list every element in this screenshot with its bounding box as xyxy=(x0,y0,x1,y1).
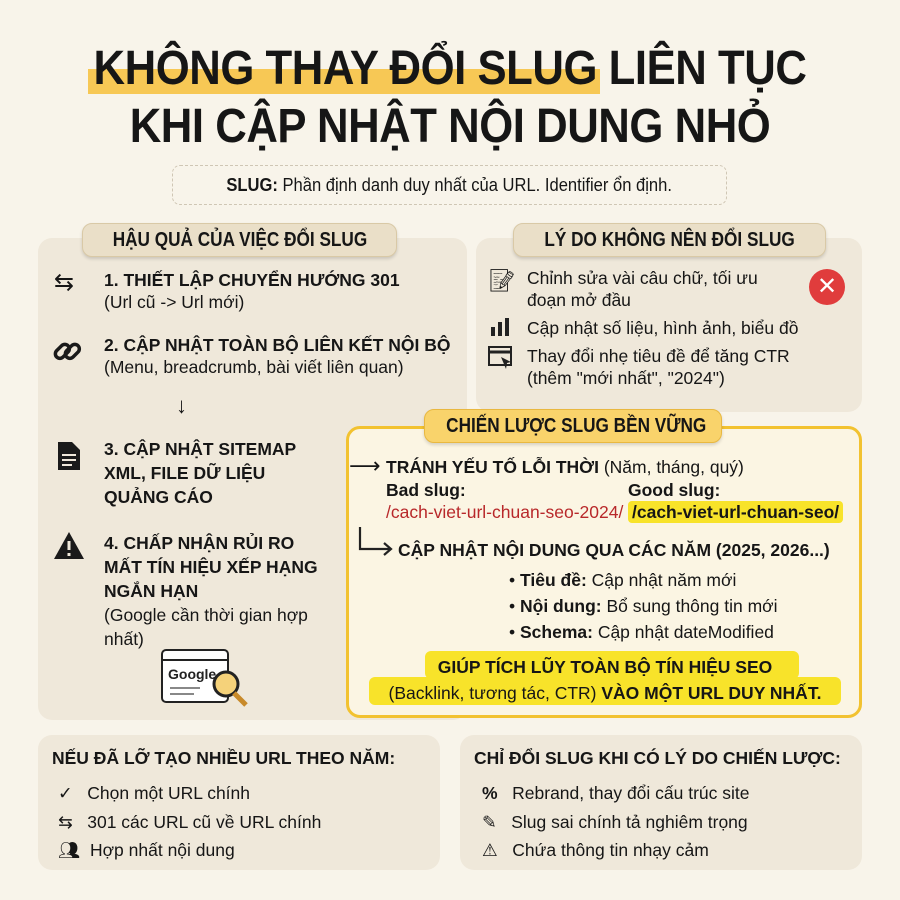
icon: google search xyxy=(161,649,248,707)
conclusion highlight xyxy=(369,651,841,705)
bad slug: /cach-viet-url-chuan-seo-2024/ xyxy=(386,502,623,522)
icon: edit: 📝︎ xyxy=(488,268,516,293)
item 4: (Google cần thời gian hợp xyxy=(104,605,308,625)
item 4: nhất) xyxy=(104,629,144,649)
icon: link xyxy=(54,342,82,360)
item 3: 3. CẬP NHẬT SITEMAP xyxy=(104,439,296,459)
item 4 xyxy=(104,533,318,649)
item 3: XML, FILE DỮ LIỆU xyxy=(104,463,265,483)
heading: NẾU ĐÃ LỠ TẠO NHIỀU URL THEO NĂM: xyxy=(52,748,395,768)
conclusion highlight: (Backlink, tương tác, CTR) VÀO MỘT URL DUY NHẤT. xyxy=(389,683,821,703)
bullet list: • Nội dung: Bổ sung thông tin mới xyxy=(509,596,778,616)
title: KHÔNG THAY ĐỔI SLUG LIÊN TỤC xyxy=(94,42,806,95)
panel: consequences xyxy=(38,238,467,720)
panel: change only for strategic reasons xyxy=(460,735,862,870)
subtitle definition box xyxy=(172,165,727,205)
heading: CHỈ ĐỔI SLUG KHI CÓ LÝ DO CHIẾN LƯỢC: xyxy=(474,748,841,768)
list: 👥︎ Hợp nhất nội dung xyxy=(58,840,235,860)
panel: sustainable slug strategy xyxy=(346,426,862,718)
good slug: /cach-viet-url-chuan-seo/ xyxy=(632,502,839,522)
item 2: 2. CẬP NHẬT TOÀN BỘ LIÊN KẾT NỘI BỘ xyxy=(104,335,450,355)
item 1 xyxy=(104,270,400,312)
L arrow xyxy=(358,527,393,556)
icon: google search: Google xyxy=(168,666,216,682)
reason 3 xyxy=(527,346,790,388)
reason 2: Cập nhật số liệu, hình ảnh, biểu đồ xyxy=(527,318,798,338)
icon: browser cursor xyxy=(488,346,512,369)
item 4: 4. CHẤP NHẬN RỦI RO xyxy=(104,533,294,553)
header: consequences: HẬU QUẢ CỦA VIỆC ĐỔI SLUG xyxy=(112,229,367,251)
subtitle definition box: SLUG: Phần định danh duy nhất của URL. Identifier ổn định. xyxy=(227,175,672,195)
title highlight xyxy=(88,69,600,94)
icon: red x: ✕ xyxy=(817,273,837,300)
icon: warning xyxy=(54,532,84,559)
item 2: (Menu, breadcrumb, bài viết liên quan) xyxy=(104,357,404,377)
avoid outdated: TRÁNH YẾU TỐ LỖI THỜI (Năm, tháng, quý) xyxy=(386,457,744,477)
conclusion highlight: GIÚP TÍCH LŨY TOÀN BỘ TÍN HIỆU SEO xyxy=(438,657,772,677)
item 3 xyxy=(104,439,296,507)
icon: chart xyxy=(491,318,509,336)
title: KHI CẬP NHẬT NỘI DUNG NHỎ xyxy=(130,100,770,153)
list xyxy=(58,783,321,860)
good slug xyxy=(628,480,843,523)
list: ✎ Slug sai chính tả nghiêm trọng xyxy=(482,812,748,832)
header: strategy xyxy=(424,409,722,443)
header: reasons: LÝ DO KHÔNG NÊN ĐỔI SLUG xyxy=(544,229,795,251)
list: % Rebrand, thay đổi cấu trúc site xyxy=(482,783,750,803)
icon: document xyxy=(58,442,80,470)
reason 3: (thêm "mới nhất", "2024") xyxy=(527,368,725,388)
title xyxy=(88,40,806,153)
item 4: NGẮN HẠN xyxy=(104,581,198,601)
panel: if multiple yearly urls xyxy=(38,735,440,870)
reason 1: đoạn mở đầu xyxy=(527,290,631,310)
item 4: MẤT TÍN HIỆU XẾP HẠNG xyxy=(104,557,318,577)
reason 1: Chỉnh sửa vài câu chữ, tối ưu xyxy=(527,268,758,288)
update content over years: CẬP NHẬT NỘI DUNG QUA CÁC NĂM (2025, 2026...) xyxy=(398,540,830,560)
list xyxy=(482,783,750,860)
list: ✓ Chọn một URL chính xyxy=(58,783,250,803)
icon: red x xyxy=(809,269,845,305)
panel: reasons not to change xyxy=(476,238,862,412)
header: strategy: CHIẾN LƯỢC SLUG BỀN VỮNG xyxy=(446,415,706,437)
bullet list: • Tiêu đề: Cập nhật năm mới xyxy=(509,570,736,590)
item 1: 1. THIẾT LẬP CHUYỂN HƯỚNG 301 xyxy=(104,270,400,290)
reason 3: Thay đổi nhẹ tiêu đề để tăng CTR xyxy=(527,346,790,366)
item 2 xyxy=(104,335,450,377)
header: consequences xyxy=(82,223,397,257)
item 3: QUẢNG CÁO xyxy=(104,487,213,507)
good slug: Good slug: xyxy=(628,480,720,500)
item 1: (Url cũ -> Url mới) xyxy=(104,292,244,312)
bullet list: • Schema: Cập nhật dateModified xyxy=(509,622,774,642)
list: ⚠ Chứa thông tin nhạy cảm xyxy=(482,840,709,860)
icon: redirect arrows: ⇆ xyxy=(54,269,74,296)
bullet list xyxy=(509,570,778,642)
header: reasons xyxy=(513,223,826,257)
bad slug xyxy=(386,480,624,522)
arrow down: ↓ xyxy=(176,393,187,418)
arrow right: ⟶ xyxy=(349,453,381,478)
reason 1 xyxy=(527,268,758,310)
list: ⇆ 301 các URL cũ về URL chính xyxy=(58,812,321,832)
bad slug: Bad slug: xyxy=(386,480,466,500)
